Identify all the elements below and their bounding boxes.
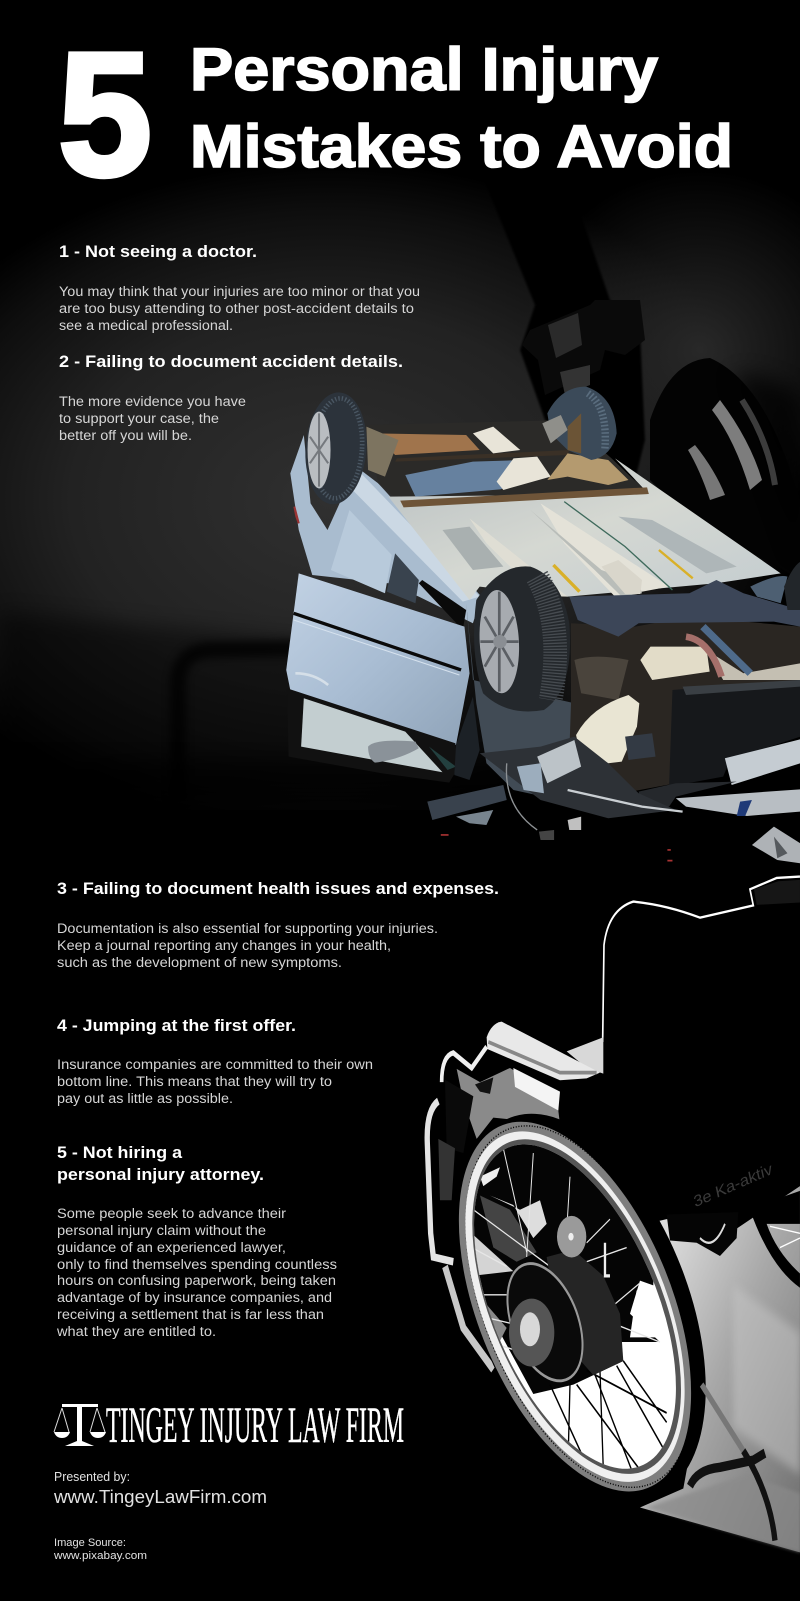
presented by — [53, 1470, 267, 1507]
caster — [667, 1212, 738, 1256]
hub — [492, 1243, 598, 1401]
fuel tank and rust — [405, 460, 547, 497]
title line 2: Mistakes to Avoid — [190, 113, 733, 180]
footrest — [690, 1385, 775, 1541]
body 5: guidance of an experienced lawyer, — [57, 1240, 286, 1255]
title line 1: Personal Injury — [190, 36, 659, 103]
motor body — [547, 1250, 623, 1375]
body 5: only to find themselves spending countless — [57, 1257, 337, 1272]
heading 4: 4 - Jumping at the first offer. — [57, 1016, 296, 1035]
text: TINGEY INJURY LAW FIRM — [106, 1398, 404, 1454]
heading 3: 3 - Failing to document health issues and expenses. — [57, 879, 499, 898]
rear left tire — [302, 390, 370, 506]
body 1: see a medical professional. — [59, 318, 233, 333]
heading 1: 1 - Not seeing a doctor. — [59, 242, 257, 261]
seat back outline — [603, 877, 800, 1042]
body 5: personal injury claim without the — [57, 1223, 266, 1238]
body 2 — [59, 394, 246, 443]
heading 2: 2 - Failing to document accident details. — [59, 352, 403, 371]
body 2: to support your case, the — [59, 411, 219, 426]
wing mirror — [368, 741, 419, 763]
body 4 — [57, 1057, 373, 1106]
body 3: Keep a journal reporting any changes in your health, — [57, 938, 391, 953]
large dark wheel behind car — [650, 358, 800, 580]
presented by: Presented by: — [54, 1470, 130, 1484]
rear left side of body — [290, 435, 481, 623]
floor — [640, 1186, 800, 1552]
open door — [286, 573, 470, 745]
black radiator and bumper — [639, 680, 800, 816]
dark wheelchair frame behind car — [484, 180, 645, 500]
mistake 4 text block — [57, 1016, 373, 1106]
image source: Image Source: — [54, 1537, 126, 1549]
rear right tire — [542, 387, 617, 460]
body 4: bottom line. This means that they will try to — [57, 1074, 332, 1089]
body 5: receiving a settlement that is far less than — [57, 1307, 324, 1322]
heading 5: personal injury attorney. — [57, 1165, 264, 1184]
body 4: Insurance companies are committed to their own — [57, 1057, 373, 1072]
body 2: The more evidence you have — [59, 394, 246, 409]
front tire — [474, 566, 570, 711]
front wheel arch and dark sub-body — [466, 603, 574, 803]
engine bay — [568, 617, 800, 803]
image source: www.pixabay.com — [53, 1550, 147, 1562]
body 1: are too busy attending to other post-accident details to — [59, 301, 414, 316]
heading 5 — [57, 1143, 264, 1184]
image source — [53, 1537, 147, 1562]
mistake 2 text block — [59, 352, 403, 443]
crash debris and lower wreckage — [427, 737, 800, 863]
mistake 3 text block — [57, 879, 499, 970]
mistake 1 text block — [59, 242, 420, 333]
logo: Tingey Injury Law Firm — [54, 1398, 404, 1454]
body 5: hours on confusing paperwork, being taken — [57, 1273, 336, 1288]
undercarriage rear dark — [366, 420, 649, 502]
body 2: better off you will be. — [59, 428, 192, 443]
illustration: wheelchair — [411, 877, 800, 1565]
body 3: Documentation is also essential for supporting your injuries. — [57, 921, 438, 936]
door glass and frame — [287, 688, 458, 783]
wheel interior — [434, 1093, 716, 1521]
body 5 — [56, 1206, 337, 1339]
body 5: Some people seek to advance their — [57, 1206, 287, 1221]
body 1: You may think that your injuries are too minor or that you — [59, 284, 420, 299]
main wheel — [458, 1114, 706, 1492]
title — [58, 17, 733, 213]
tire — [411, 1048, 755, 1565]
floor pan — [388, 458, 781, 600]
illustration: overturned car — [286, 387, 800, 863]
washer tank — [576, 695, 639, 763]
body 3 — [57, 921, 438, 970]
big number 5: 5 — [58, 17, 152, 213]
body 4: pay out as little as possible. — [57, 1091, 233, 1106]
armrest and frame — [427, 1022, 603, 1369]
brand mark on seat: 3e Ka-aktiv — [692, 1159, 774, 1211]
icon: scales of justice — [54, 1404, 106, 1446]
heading 5: 5 - Not hiring a — [57, 1143, 183, 1162]
presented by: www.TingeyLawFirm.com — [53, 1486, 267, 1507]
body 3: such as the development of new symptoms. — [57, 955, 342, 970]
body 1 — [59, 284, 420, 333]
front frame rail — [569, 580, 800, 637]
small disc — [557, 1216, 586, 1257]
body 5: advantage of by insurance companies, and — [57, 1290, 332, 1305]
body 5: what they are entitled to. — [56, 1324, 216, 1339]
mistake 5 text block — [56, 1143, 337, 1339]
rear right wheel — [750, 1191, 800, 1288]
